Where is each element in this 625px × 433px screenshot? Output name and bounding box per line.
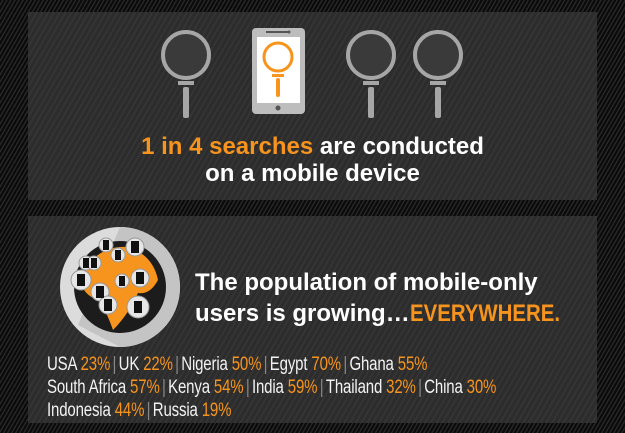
icon: magnifier 2 [348, 32, 394, 118]
panel: mobile searches [28, 12, 597, 200]
icon: magnifier 1 [163, 32, 209, 118]
headline: 1 in 4 searches [141, 133, 484, 187]
headline: 1 in 4 searches: on a mobile device [205, 160, 420, 187]
icons row [161, 28, 463, 118]
icon: phone with orange magnifier [252, 28, 305, 114]
country stats [47, 354, 496, 421]
heading: mobile-only users: EVERYWHERE. [410, 300, 560, 327]
panel: mobile-only users [28, 216, 597, 423]
stats line 1: USA 23%|UK 22%|Nigeria 50%|Egypt 70%|Ghana 55% [47, 354, 427, 375]
heading: mobile-only users [195, 269, 560, 327]
heading: mobile-only users: The population of mobile-only [195, 269, 538, 296]
icon: globe with phones [60, 227, 180, 347]
stats line 3: Indonesia 44%|Russia 19% [47, 400, 231, 421]
headline: 1 in 4 searches: 1 in 4 searches are conducted [141, 133, 484, 160]
icon: magnifier 3 [415, 32, 461, 118]
stats line 2: South Africa 57%|Kenya 54%|India 59%|Thailand 32%|China 30% [47, 377, 496, 398]
heading: mobile-only users: users is growing… [195, 300, 410, 327]
